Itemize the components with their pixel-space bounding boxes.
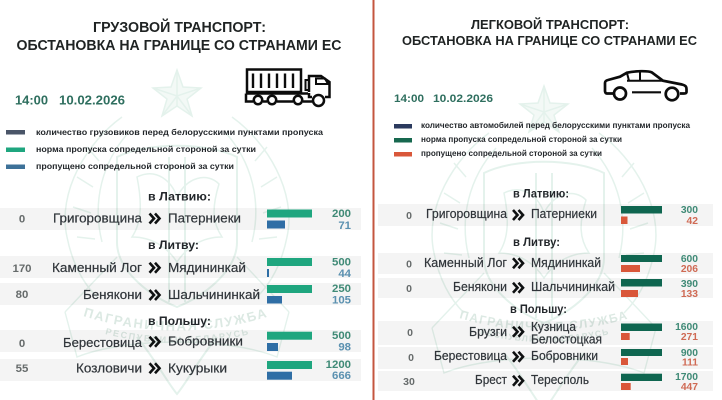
row: Grigorovshchina - Paternieki: [0, 208, 361, 232]
row: Berestovitsa - Bobrowniki: 98: [338, 342, 351, 354]
row: Benyakoni - Salcininkai: Шальчининкай: [168, 288, 260, 302]
date and time: freight: 10.02.2026: [59, 94, 125, 108]
row: Grigorovshchina - Paternieki: 0: [19, 214, 25, 226]
row: Kozlovichi - Kukuryki: Козловичи: [76, 362, 142, 376]
title: freight: [16, 18, 342, 54]
row: Brest - Terespol: 30: [403, 376, 415, 388]
date and time: passenger: [394, 93, 493, 105]
panel: freight transport: [0, 18, 361, 382]
row: Kamenny Log - Medininkai: Каменный Лог: [424, 256, 507, 270]
panel: passenger transport: [378, 17, 713, 393]
row: Grigorovshchina - Paternieki: [378, 204, 713, 227]
row: Brest - Terespol: Брест: [475, 373, 507, 387]
row: Berestovitsa - Bobrowniki: Бобровники: [531, 349, 598, 363]
row: Kozlovichi - Kukuryki: 55: [16, 363, 29, 375]
row: Berestovitsa - Bobrowniki: [0, 330, 361, 354]
row: Bruzgi - Kuznica Bialostocka: 0: [407, 327, 413, 339]
date and time: freight: [15, 94, 125, 108]
legend: freight: количество грузовиков перед белорусскими пунктами пропуска: [36, 127, 323, 137]
heading: to Poland: в Польшу:: [510, 304, 567, 316]
row: Grigorovshchina - Paternieki: 42: [687, 216, 698, 227]
watermark: right emblem: [431, 84, 657, 400]
watermark: right emblem: РЕСПУБЛИКИ БЕЛАРУСЬ: [480, 328, 608, 342]
date and time: freight: 14:00: [15, 94, 48, 108]
row: Grigorovshchina - Paternieki: 300: [681, 205, 698, 216]
row: Berestovitsa - Bobrowniki: 111: [682, 358, 698, 368]
row: Benyakoni - Salcininkai: [378, 278, 713, 300]
row: Kamenny Log - Medininkai: 0: [406, 258, 412, 270]
row: Grigorovshchina - Paternieki: 200: [332, 208, 351, 220]
heading: to Latvia: в Латвию:: [513, 189, 569, 201]
row: Bruzgi - Kuznica Bialostocka: Брузги: [469, 325, 507, 339]
row: Grigorovshchina - Paternieki: Григоровщина: [53, 212, 142, 226]
row: Benyakoni - Salcininkai: 133: [681, 289, 698, 300]
row: Berestovitsa - Bobrowniki: 500: [332, 330, 351, 342]
row: Berestovitsa - Bobrowniki: Бобровники: [168, 335, 243, 349]
row: Benyakoni - Salcininkai: 390: [681, 279, 698, 290]
row: Kozlovichi - Kukuryki: Кукурыки: [168, 362, 227, 376]
legend: freight: пропущено сопредельной стороной за сутки: [36, 161, 234, 171]
row: Kozlovichi - Kukuryki: [0, 359, 361, 382]
row: Kamenny Log - Medininkai: Каменный Лог: [52, 261, 142, 275]
row: Bruzgi - Kuznica Bialostocka: Белостоцкая: [531, 332, 602, 346]
date and time: passenger: 10.02.2026: [433, 93, 493, 105]
watermark: left emblem: РЕСПУБЛИКИ БЕЛАРУСЬ: [106, 328, 248, 343]
row: Kamenny Log - Medininkai: [0, 256, 361, 280]
row: Grigorovshchina - Paternieki: 71: [338, 220, 352, 232]
row: Benyakoni - Salcininkai: Бенякони: [453, 280, 507, 294]
row: Benyakoni - Salcininkai: 80: [16, 289, 28, 301]
row: Berestovitsa - Bobrowniki: Берестовица: [63, 336, 142, 350]
row: Berestovitsa - Bobrowniki: [378, 347, 713, 369]
row: Grigorovshchina - Paternieki: 0: [406, 210, 412, 222]
divider between panels: [372, 0, 374, 400]
date and time: passenger: 14:00: [394, 93, 424, 105]
row: Brest - Terespol: 447: [681, 382, 698, 393]
legend: passenger: пропущено сопредельной стороной за сутки: [421, 148, 602, 158]
row: Kamenny Log - Medininkai: Мядининкай: [531, 256, 601, 270]
legend: passenger: [394, 120, 690, 158]
title: passenger: ЛЕГКОВОЙ ТРАНСПОРТ:: [471, 17, 629, 32]
title: freight: ОБСТАНОВКА НА ГРАНИЦЕ СО СТРАНАМИ ЕС: [16, 38, 342, 54]
row: Bruzgi - Kuznica Bialostocka: [378, 320, 713, 346]
row: Bruzgi - Kuznica Bialostocka: 1600: [675, 322, 698, 333]
row: Benyakoni - Salcininkai: [0, 283, 361, 307]
row: Berestovitsa - Bobrowniki: 0: [408, 352, 414, 364]
row: Kamenny Log - Medininkai: 600: [681, 254, 698, 265]
icon: car: [605, 71, 686, 100]
row: Brest - Terespol: Тересполь: [531, 373, 589, 387]
row: Benyakoni - Salcininkai: 0: [406, 283, 412, 295]
title: freight: ГРУЗОВОЙ ТРАНСПОРТ:: [93, 18, 266, 36]
row: Benyakoni - Salcininkai: Шальчининкай: [531, 280, 615, 294]
row: Grigorovshchina - Paternieki: Григоровщина: [426, 207, 507, 221]
row: Kamenny Log - Medininkai: [378, 253, 713, 275]
title: passenger: ОБСТАНОВКА НА ГРАНИЦЕ СО СТРАНАМИ ЕС: [402, 33, 697, 48]
row: Berestovitsa - Bobrowniki: Берестовица: [434, 349, 507, 363]
watermark: left emblem: ПАГРАНИЧНАЯ СЛУЖБА: [84, 308, 267, 330]
watermark: left emblem: [64, 68, 290, 396]
row: Benyakoni - Salcininkai: Бенякони: [83, 288, 142, 302]
row: Brest - Terespol: [378, 371, 713, 393]
row: Kamenny Log - Medininkai: Мядининкай: [168, 261, 246, 275]
row: Kozlovichi - Kukuryki: 1200: [326, 359, 351, 371]
row: Kamenny Log - Medininkai: 500: [332, 257, 351, 269]
legend: freight: норма пропуска сопредельной стороной за сутки: [36, 144, 256, 154]
row: Bruzgi - Kuznica Bialostocka: Кузница: [531, 320, 576, 334]
heading: to Lithuania: в Литву:: [513, 237, 560, 249]
legend: passenger: количество автомобилей перед белорусскими пунктами пропуска: [421, 120, 690, 130]
row: Kamenny Log - Medininkai: 170: [12, 263, 32, 275]
icon: truck: [246, 70, 330, 106]
heading: to Latvia: в Латвию:: [148, 192, 211, 204]
watermark: right emblem: ПАГРАНИЧНАЯ СЛУЖБА: [460, 310, 628, 330]
row: Grigorovshchina - Paternieki: Патерниеки: [531, 207, 597, 221]
heading: to Lithuania: в Литву:: [148, 240, 199, 252]
row: Kamenny Log - Medininkai: 206: [681, 264, 698, 275]
row: Bruzgi - Kuznica Bialostocka: 271: [681, 332, 698, 343]
row: Benyakoni - Salcininkai: 105: [332, 295, 352, 307]
legend: freight: [6, 127, 323, 171]
row: Kamenny Log - Medininkai: 44: [338, 268, 352, 280]
row: Berestovitsa - Bobrowniki: 0: [19, 338, 25, 350]
title: passenger: [402, 17, 697, 48]
row: Brest - Terespol: 1700: [675, 372, 698, 383]
legend: passenger: норма пропуска сопредельной стороной за сутки: [421, 134, 622, 144]
row: Benyakoni - Salcininkai: 250: [332, 283, 351, 295]
row: Grigorovshchina - Paternieki: Патерниеки: [168, 212, 241, 226]
heading: to Poland: в Польшу:: [148, 316, 211, 328]
row: Berestovitsa - Bobrowniki: 900: [681, 348, 698, 359]
row: Kozlovichi - Kukuryki: 666: [332, 370, 351, 382]
